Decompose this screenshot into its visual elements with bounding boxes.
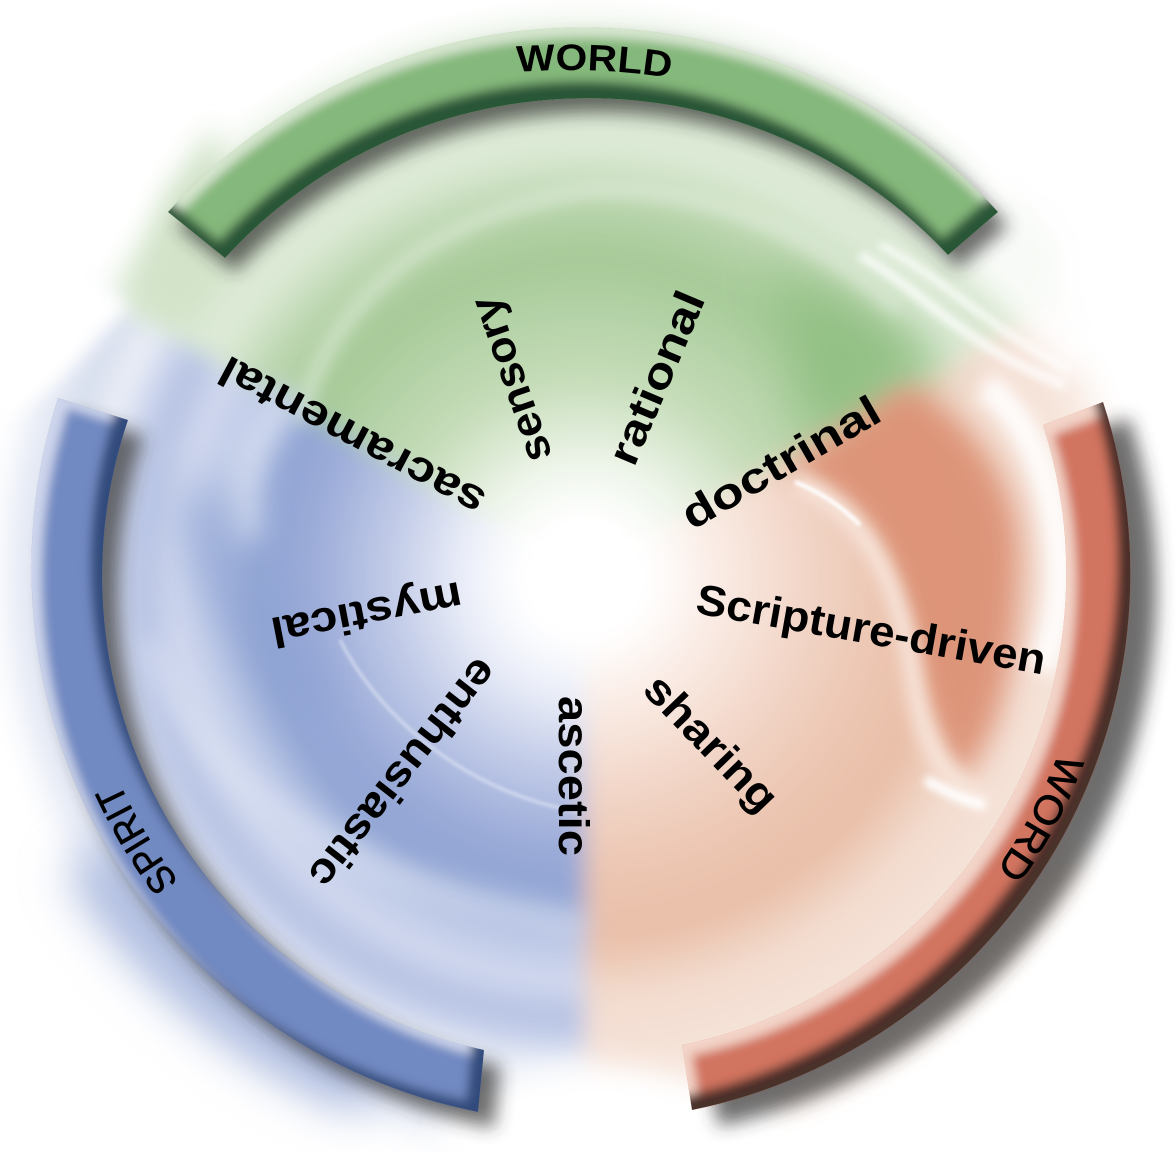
shadow: blue arc bbox=[47, 414, 500, 1128]
arc: WORLD green band bbox=[168, 28, 998, 258]
spoke label: doctrinal: doctrinal bbox=[673, 387, 889, 539]
swirl: blue light band bbox=[241, 395, 290, 540]
label: WORLD: WORLD bbox=[516, 44, 671, 76]
swirl: white streaks upper right bbox=[860, 245, 1070, 385]
shadow: red arc bbox=[708, 418, 1156, 1126]
arc: SPIRIT blue band bbox=[31, 398, 484, 1112]
spoke label: enthusiastic: enthusiastic bbox=[299, 649, 507, 897]
swirl: bright highlight near word arc bbox=[925, 780, 985, 805]
spoke label: ascetic: ascetic bbox=[549, 696, 597, 856]
spill: green outside right bbox=[980, 190, 1060, 300]
swirl: deep green patch bbox=[760, 270, 945, 440]
swirl: pale green band bbox=[300, 190, 900, 420]
spoke label: sharing: sharing bbox=[634, 665, 788, 822]
swirl: blue dark patch bbox=[205, 490, 320, 700]
swirl: lower blue band bbox=[150, 640, 585, 925]
spoke label: sensory: sensory bbox=[461, 290, 562, 468]
swirl: thin blue highlight bbox=[340, 640, 580, 812]
swirl: bright highlight at doctrinal bbox=[795, 482, 860, 525]
spoke label: Scripture-driven: Scripture-driven bbox=[693, 576, 1049, 684]
fade: white upper left bbox=[0, 200, 130, 420]
spill: green outside left bbox=[130, 125, 240, 320]
label: SPIRIT: SPIRIT bbox=[94, 790, 176, 894]
arc: WORD red band bbox=[682, 402, 1130, 1110]
label: WORD: WORD bbox=[1002, 760, 1084, 879]
swirl: streak across red sector bbox=[795, 482, 990, 805]
shadow: green arc bbox=[178, 42, 1008, 272]
spoke label: sacramental: sacramental bbox=[211, 346, 493, 526]
spoke label: rational: rational bbox=[599, 284, 715, 472]
spill: red outside lower right bbox=[776, 855, 1070, 1101]
swirl: deep red region bbox=[785, 385, 1020, 780]
swirl: white band beside word arc bbox=[985, 385, 1060, 670]
swirl: white fade upper right bbox=[880, 150, 1176, 370]
spoke label: mystical: mystical bbox=[267, 572, 467, 656]
fade: white below arc gap bbox=[435, 1065, 735, 1152]
spill: blue outside lower left bbox=[91, 855, 372, 1085]
